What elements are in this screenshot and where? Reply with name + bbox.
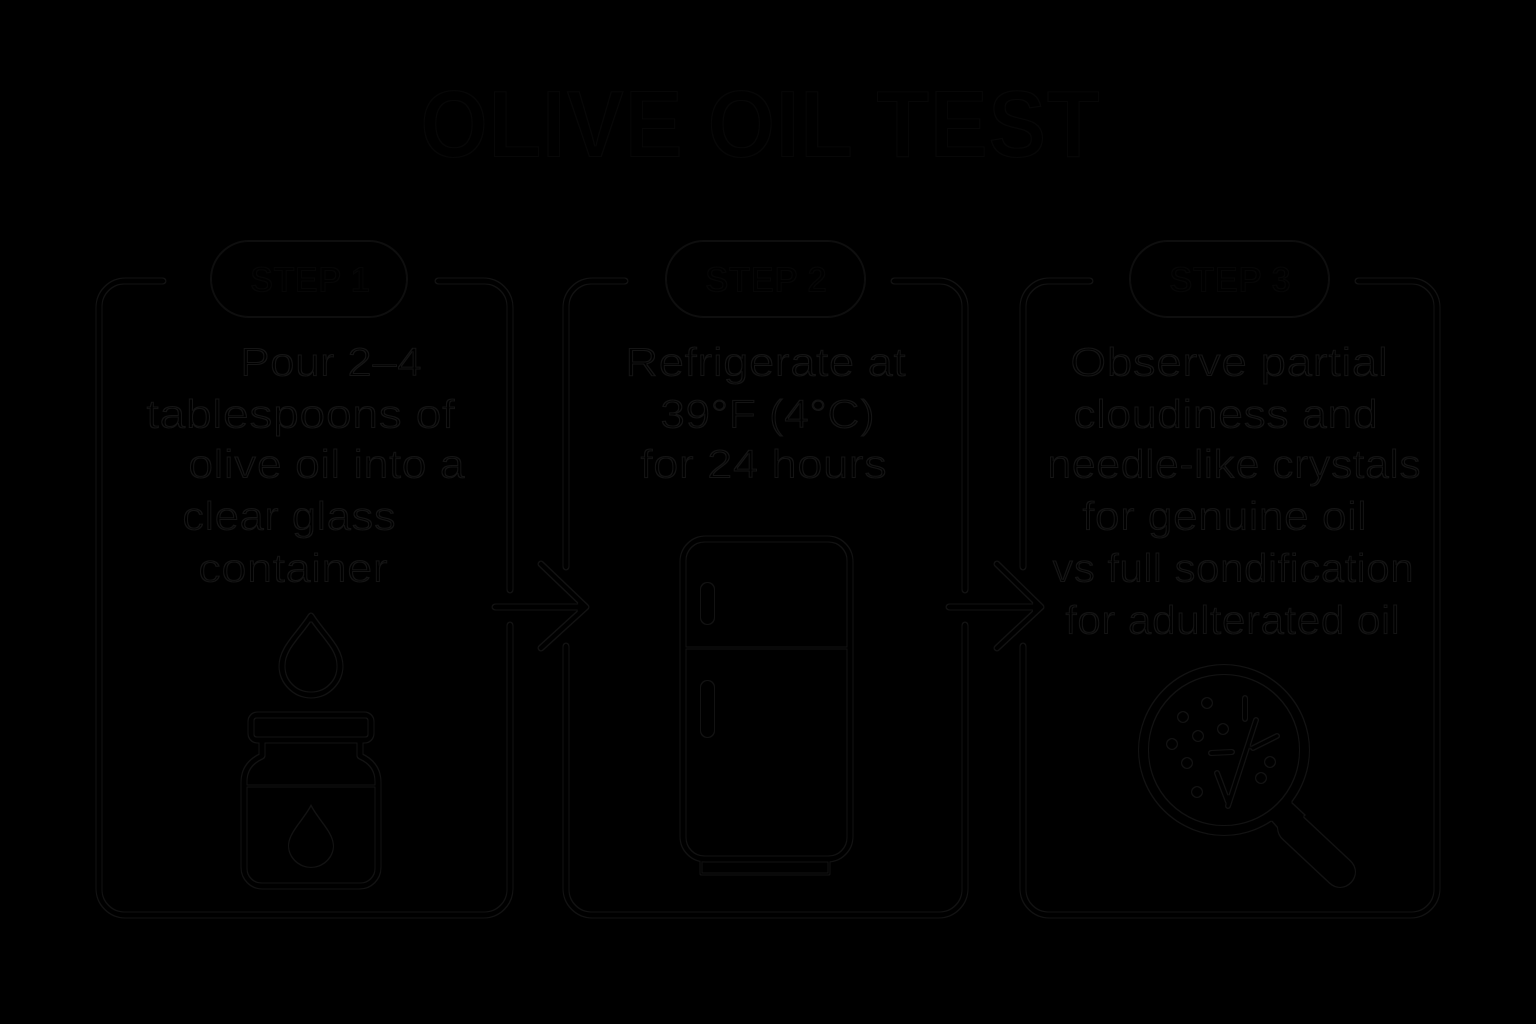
panel: step 1 (99, 241, 510, 915)
text: step 2 instruction: 39°F (4°C) (660, 391, 875, 437)
text: step 2 instruction (625, 339, 907, 487)
panel: step 3 (1023, 241, 1437, 915)
badge: step 2 (666, 241, 865, 317)
text: step 1 instruction: olive oil into a (188, 441, 465, 487)
icon: refrigerator (683, 539, 850, 874)
text: step 3 instruction (1047, 339, 1421, 643)
text: step 1 instruction: container (198, 545, 388, 591)
arrow: step 1 to step 2 (495, 564, 586, 648)
badge: step 3: STEP 3 (1169, 259, 1291, 300)
text: step 1 instruction: clear glass (182, 493, 396, 539)
text: step 3 instruction: needle-like crystals (1047, 441, 1421, 487)
text: step 3 instruction: vs full sondification (1052, 545, 1414, 591)
text: step 3 instruction: cloudiness and (1073, 391, 1378, 437)
text: step 1 instruction (146, 339, 465, 591)
text: step 2 instruction: Refrigerate at (625, 339, 907, 385)
icon: oil drop over glass jar (244, 616, 378, 886)
text: step 1 instruction: Pour 2–4 (240, 339, 422, 385)
badge: step 1: STEP 1 (250, 259, 370, 300)
panel frame: step 3 (1023, 281, 1437, 915)
badge: step 2: STEP 2 (705, 259, 827, 300)
panel frame: step 2 (566, 281, 965, 915)
badge: step 3 (1130, 241, 1329, 317)
panel frame: step 1 (99, 281, 510, 915)
badge: step 1 (211, 241, 407, 317)
arrow: step 2 to step 3 (949, 564, 1041, 648)
panel: step 2 (566, 241, 965, 915)
text: step 1 instruction: tablespoons of (146, 391, 456, 437)
text: step 3 instruction: for genuine oil (1082, 493, 1367, 539)
icon: magnifying glass over crystals (1144, 670, 1340, 872)
text: step 2 instruction: for 24 hours (640, 441, 887, 487)
text: step 3 instruction: for adulterated oil (1065, 597, 1400, 643)
text: step 3 instruction: Observe partial (1070, 339, 1388, 385)
title: OLIVE OIL TEST (420, 71, 1100, 178)
